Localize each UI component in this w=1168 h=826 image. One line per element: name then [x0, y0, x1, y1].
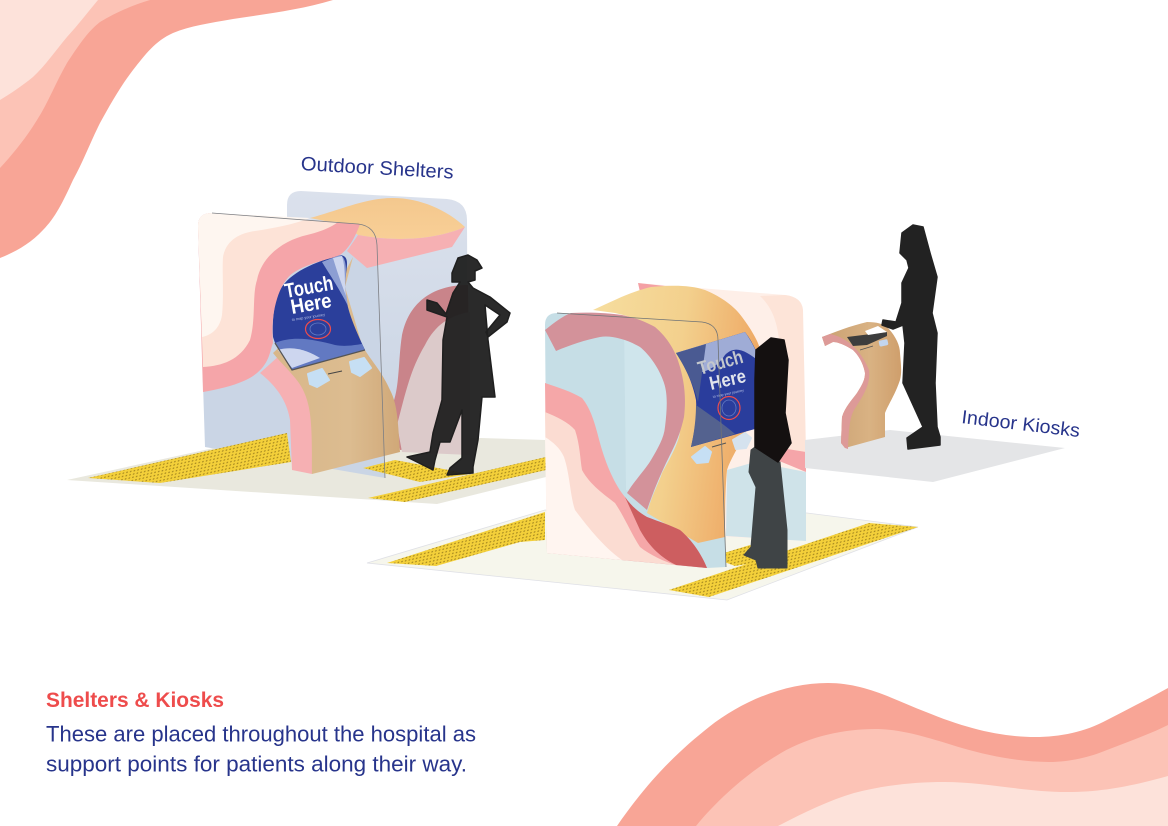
caption body [46, 722, 476, 776]
screen text: Touch [696, 347, 746, 380]
silhouette: person [744, 338, 791, 568]
kiosk screen: to map your journey [292, 313, 325, 322]
kiosk body [260, 257, 400, 474]
kiosk screen [676, 332, 764, 447]
front glass panel [545, 313, 726, 568]
illustration: indoor kiosk [805, 225, 1065, 482]
kiosk screen: Here [289, 289, 333, 319]
background wave: bottom right [617, 683, 1168, 826]
label: Outdoor Shelters: Outdoor Shelters [300, 153, 454, 184]
kiosk screen [273, 255, 365, 370]
front glass edge [212, 213, 385, 478]
back panel [638, 283, 806, 541]
front glass panel [198, 213, 385, 478]
tactile paving [88, 433, 546, 502]
illustration: centre shelter [367, 283, 918, 600]
back panel wave [391, 285, 470, 455]
kiosk buttons [692, 433, 751, 463]
screen text: Touch [283, 272, 335, 303]
kiosk body [822, 322, 901, 449]
floor slab [67, 432, 546, 504]
front panel wave [198, 213, 360, 392]
kiosk screen: to map your journey [712, 388, 744, 399]
floor slab [367, 510, 918, 600]
back glass panel [287, 191, 468, 440]
kiosk body [593, 286, 760, 543]
background wave: top left [0, 0, 333, 258]
illustration: outdoor shelter [67, 191, 546, 504]
text block: caption [46, 688, 476, 776]
roof [310, 198, 465, 268]
caption body: These are placed throughout the hospital as [46, 722, 476, 746]
silhouette: person [882, 225, 940, 449]
caption heading: Shelters & Kiosks [46, 688, 224, 712]
kiosk buttons [308, 358, 371, 387]
silhouette: person [407, 255, 510, 475]
kiosk top panel [847, 326, 889, 350]
caption body: support points for patients along their way. [46, 752, 467, 776]
touch target [718, 396, 740, 420]
front panel pink wave [545, 383, 707, 568]
front glass edge [557, 313, 726, 567]
tactile paving [387, 512, 918, 597]
floor slab [805, 430, 1065, 482]
kiosk screen: Here [707, 366, 748, 395]
label: Indoor Kiosks: Indoor Kiosks [960, 407, 1081, 442]
touch target [306, 320, 330, 338]
front panel dark pink band [545, 313, 685, 510]
